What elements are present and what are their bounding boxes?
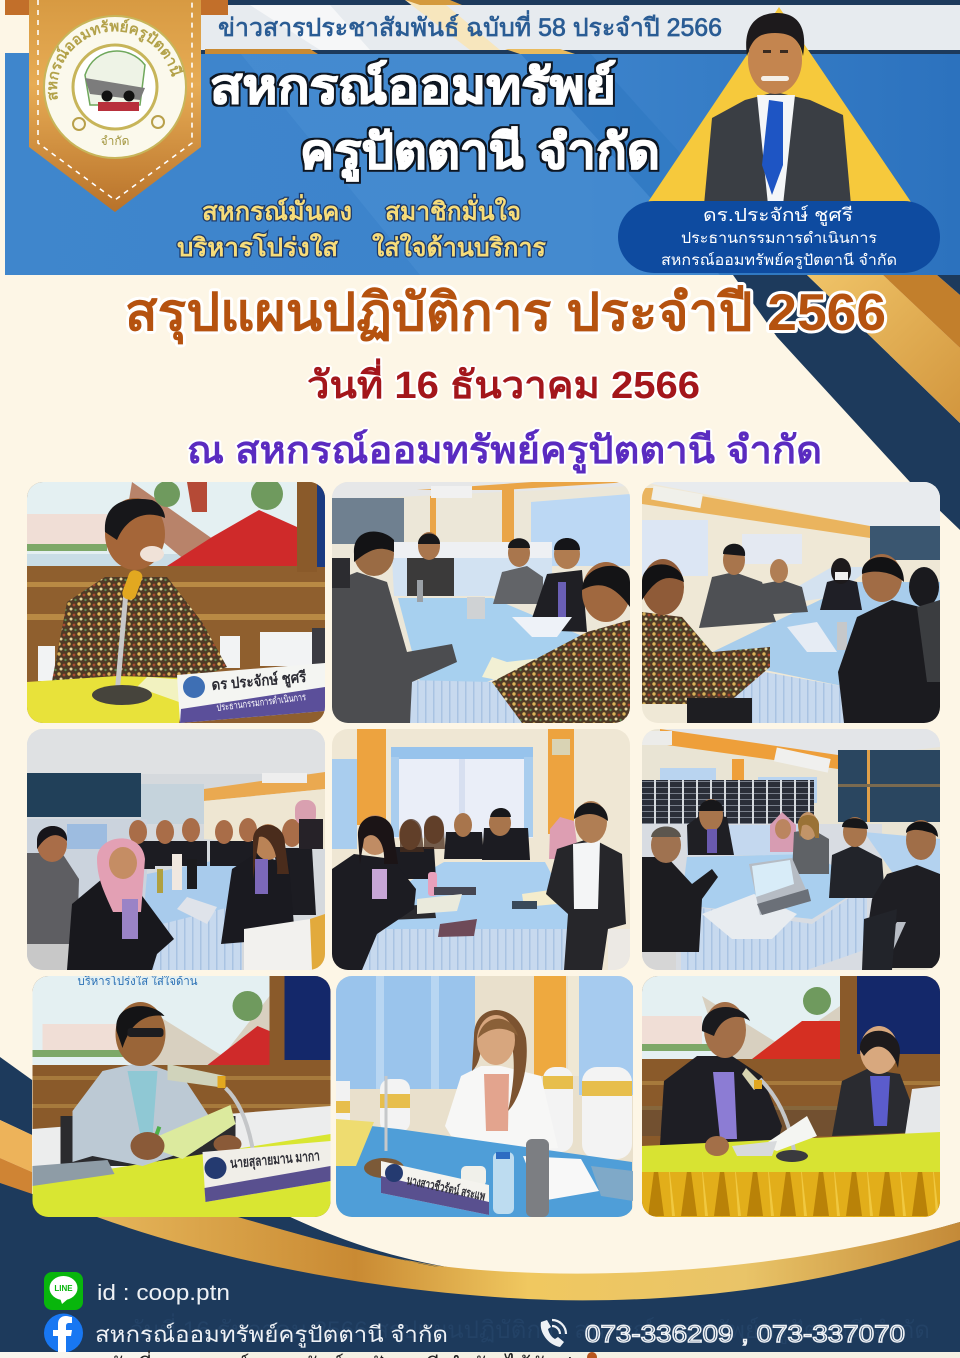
slogans [177, 194, 547, 262]
photo 1: chairman speaking: ดร ประจักษ์ ชูศรี [211, 668, 308, 695]
phone numbers: 073-336209 , 073-337070 [585, 1321, 905, 1348]
name pill: chairman [618, 201, 940, 273]
photo 8: woman in white blazer [336, 976, 633, 1217]
icon: telephone [541, 1320, 566, 1347]
date line: วันที่ 16 ธันวาคม 2566 [307, 358, 700, 407]
photo 5: group at meeting table [332, 729, 630, 970]
Facebook page text: สหกรณ์ออมทรัพย์ครูปัตตานี จำกัด [95, 1322, 448, 1348]
photo 7: speaker in grey suit [32, 976, 330, 1217]
footer: navy base and gold swoosh [0, 1183, 960, 1358]
diagonal stripes: upper right [733, 275, 960, 530]
name pill: chairman: ประธานกรรมการดำเนินการ [681, 230, 877, 247]
icon: LINE [44, 1272, 83, 1310]
icon: LINE: LINE [54, 1284, 73, 1293]
photo 6: group with laptop [642, 729, 940, 970]
newsletter issue line: ข่าวสารประชาสัมพันธ์ ฉบับที่ 58 ประจำปี 2566 [218, 10, 722, 42]
faint background line: วันที่ 16 ธันวาคม 2566 สรุปแผนปฏิบัติการ สหกรณ์ออมทรัพย์ครูปัตตานี จำกัด [130, 1313, 930, 1345]
ribbon badge with cooperative seal [29, 0, 201, 212]
LINE id text: id : coop.ptn [97, 1280, 230, 1305]
name pill: chairman: ดร.ประจักษ์ ชูศรี [703, 205, 853, 226]
photo 8: woman in white blazer: นางสาวชีวรัตน์ สระแพ [405, 1172, 487, 1204]
bottom strip with clipped text [0, 1350, 960, 1358]
ribbon badge with cooperative seal: สหกรณ์ออมทรัพย์ครูปัตตานี [48, 18, 184, 100]
title [210, 60, 660, 182]
header panel [5, 0, 960, 275]
slogans: สมาชิกมั่นใจ [385, 194, 521, 226]
photo 3: meeting at table [642, 482, 940, 723]
icon: Facebook [44, 1314, 83, 1352]
main heading: สรุปแผนปฏิบัติการ ประจำปี 2566 [125, 284, 886, 345]
photo 9: two officers at gold table [642, 976, 940, 1217]
photo 2: meeting at table [332, 482, 630, 723]
photo 1: chairman speaking [27, 482, 325, 723]
photo 4: women at meeting [27, 729, 325, 970]
slogans: บริหารโปร่งใส [177, 232, 339, 262]
title: ครูปัตตานี จำกัด [300, 126, 660, 182]
name pill: chairman: สหกรณ์ออมทรัพย์ครูปัตตานี จำกัด [661, 252, 897, 269]
ribbon badge with cooperative seal: จำกัด [101, 134, 129, 148]
top band [225, 0, 960, 5]
slogans: สหกรณ์มั่นคง [202, 194, 352, 226]
photo 7: speaker in grey suit: บริหารโปร่งใส ใส่ใจด้าน [78, 974, 198, 988]
portrait: chairman on yellow triangle [648, 7, 911, 205]
diagonal stripes: lower left [0, 1057, 32, 1240]
title: สหกรณ์ออมทรัพย์ [210, 60, 616, 114]
venue line: ณ สหกรณ์ออมทรัพย์ครูปัตตานี จำกัด [187, 429, 822, 474]
slogans: ใส่ใจด้านบริการ [372, 232, 547, 262]
